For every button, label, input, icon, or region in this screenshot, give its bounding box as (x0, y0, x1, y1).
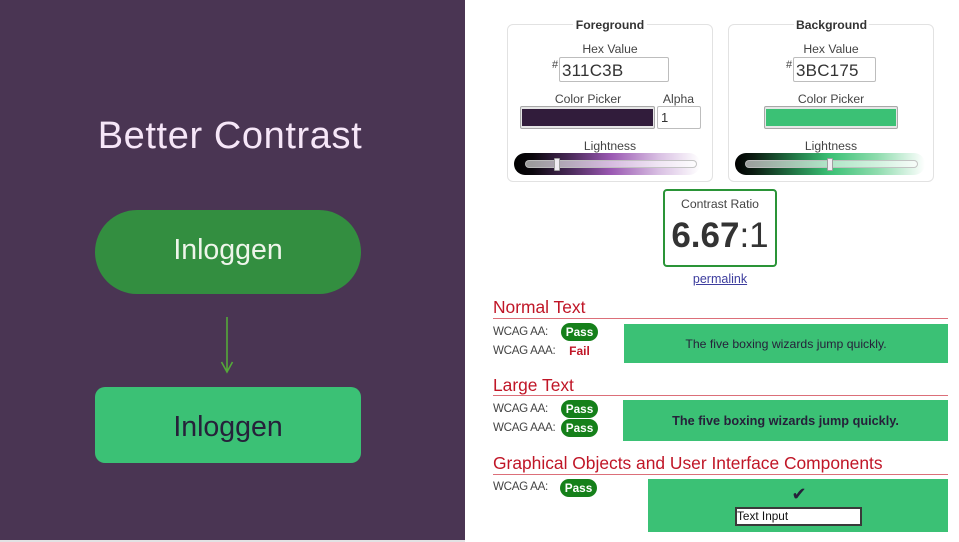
section: graphical objects (493, 453, 948, 532)
WCAG AA label: WCAG AA: (493, 480, 548, 493)
colour picker label: Color Picker (798, 92, 864, 106)
title: Better Contrast (98, 115, 362, 157)
hex input (559, 57, 669, 82)
alpha input (657, 106, 701, 129)
heading: Graphical Objects and User Interface Components (493, 453, 883, 473)
panel: foreground (507, 24, 713, 182)
normal sample: The five boxing wizards jump quickly. (685, 337, 887, 351)
text input: Text Input (737, 509, 788, 523)
WCAG AAA label: WCAG AAA: (493, 344, 555, 357)
lightness slider (514, 153, 700, 175)
divider (493, 474, 948, 475)
colour picker label: Color Picker (555, 92, 621, 106)
heading: Large Text (493, 375, 574, 395)
button: better contrast rectangle: Inloggen (173, 411, 283, 443)
pass badge (560, 479, 597, 497)
slider thumb (827, 158, 833, 171)
arrow (220, 317, 234, 374)
pass badge: Pass (566, 402, 593, 416)
normal sample (624, 324, 948, 363)
button: low contrast pill (95, 210, 361, 294)
divider (493, 318, 948, 319)
foreground legend: Foreground (576, 18, 644, 32)
UI sample (648, 479, 948, 532)
bottom edge line (0, 540, 465, 542)
check mark: ✔ (791, 484, 807, 505)
fail label: Fail (569, 344, 590, 358)
permalink: permalink (693, 272, 747, 286)
pass badge (561, 323, 598, 341)
colour swatch (764, 106, 898, 129)
alpha label: Alpha (663, 92, 694, 106)
slider thumb (554, 158, 560, 171)
panel: background (728, 24, 934, 182)
lightness label: Lightness (584, 139, 636, 153)
lightness slider (735, 153, 925, 175)
large sample (623, 400, 948, 441)
WCAG AAA label: WCAG AAA: (493, 421, 555, 434)
WCAG AA label: WCAG AA: (493, 325, 548, 338)
lightness label: Lightness (805, 139, 857, 153)
pass badge: Pass (566, 325, 593, 339)
large sample: The five boxing wizards jump quickly. (672, 414, 899, 428)
section: normal text (493, 297, 948, 363)
background legend: Background (796, 18, 867, 32)
pass badge: Pass (566, 421, 593, 435)
divider (493, 395, 948, 396)
hex input (793, 57, 876, 82)
hex input: 311C3B (562, 61, 623, 80)
colour swatch (520, 106, 655, 129)
contrast value: 6.67:1 (671, 216, 769, 255)
button: better contrast rectangle (95, 387, 361, 463)
hex label: Hex Value (582, 42, 638, 56)
button: low contrast pill: Inloggen (173, 234, 283, 266)
pass badge (561, 400, 598, 418)
contrast ratio box (663, 189, 777, 267)
hash sign: # (552, 59, 558, 71)
hash sign: # (786, 59, 792, 71)
panel: better contrast example (0, 0, 465, 540)
pass badge (561, 419, 598, 437)
section: large text (493, 375, 948, 441)
alpha input: 1 (661, 110, 668, 125)
heading: Normal Text (493, 297, 585, 317)
hex label: Hex Value (803, 42, 859, 56)
WCAG AA label: WCAG AA: (493, 402, 548, 415)
pass badge: Pass (565, 481, 592, 495)
contrast label: Contrast Ratio (681, 197, 759, 211)
text input (735, 507, 862, 526)
hex input: 3BC175 (796, 61, 859, 80)
